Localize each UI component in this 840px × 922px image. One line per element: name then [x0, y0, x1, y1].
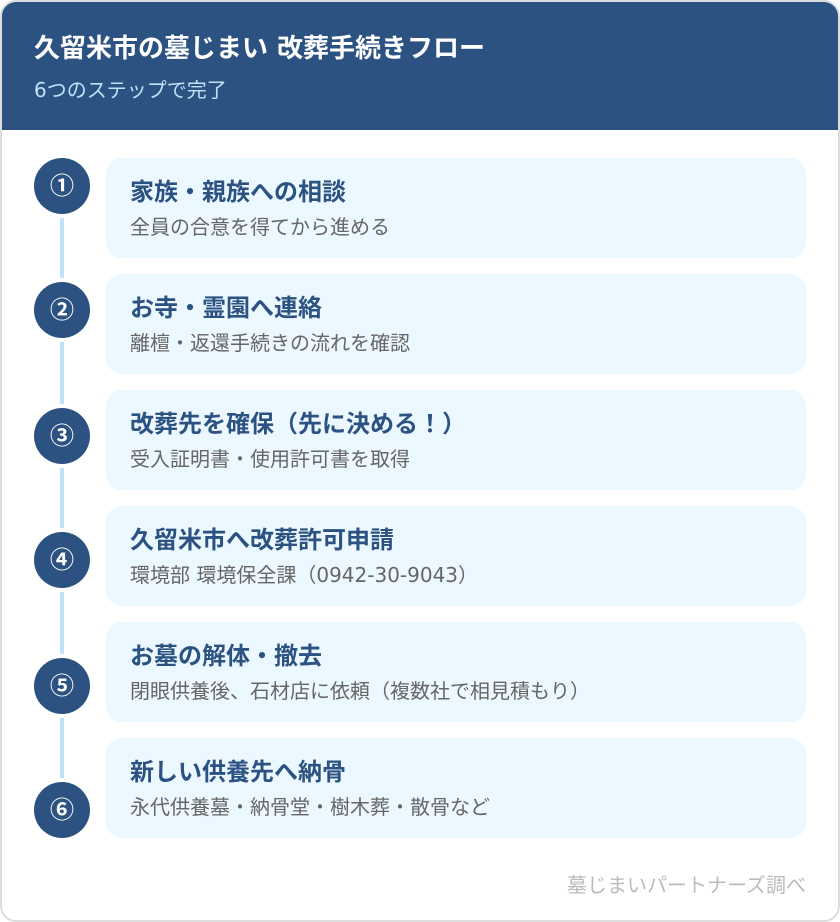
step 5 description: 閉眼供養後、石材店に依頼（複数社で相見積もり） — [130, 679, 590, 703]
step card 5 — [106, 622, 806, 722]
step 4 heading: 久留米市へ改葬許可申請 — [130, 526, 394, 554]
connector 2 — [60, 342, 64, 404]
connector 5 — [60, 718, 64, 778]
step marker 3 — [34, 408, 90, 464]
connector 1 — [60, 218, 64, 278]
step marker 1 — [34, 158, 90, 214]
step 4 description: 環境部 環境保全課（0942-30-9043） — [130, 563, 478, 587]
title: 久留米市の墓じまい 改葬手続きフロー — [34, 34, 485, 64]
connector 3 — [60, 468, 64, 528]
step 3 description: 受入証明書・使用許可書を取得 — [130, 447, 410, 471]
step marker 2 — [34, 282, 90, 338]
step marker 6: ⑥ — [50, 790, 74, 825]
step card 6 — [106, 738, 806, 838]
step 6 description: 永代供養墓・納骨堂・樹木葬・散骨など — [130, 795, 490, 819]
step marker 6 — [34, 782, 90, 838]
step 1 description: 全員の合意を得てから進める — [130, 215, 390, 239]
step 3 heading: 改葬先を確保（先に決める！） — [130, 410, 466, 438]
step marker 4: ④ — [50, 540, 74, 575]
step card 3 — [106, 390, 806, 490]
step card 1 — [106, 158, 806, 258]
step card 4 — [106, 506, 806, 606]
step card 2 — [106, 274, 806, 374]
step marker 5 — [34, 658, 90, 714]
step 5 heading: お墓の解体・撤去 — [130, 642, 322, 670]
step 2 description: 離檀・返還手続きの流れを確認 — [130, 331, 410, 355]
step marker 5: ⑤ — [50, 666, 74, 701]
panel: header band — [2, 2, 838, 130]
step 1 heading: 家族・親族への相談 — [130, 178, 346, 206]
step marker 2: ② — [50, 290, 74, 325]
step marker 3: ③ — [50, 416, 74, 451]
subtitle: 6つのステップで完了 — [34, 78, 227, 102]
step 2 heading: お寺・霊園へ連絡 — [130, 294, 322, 322]
step 6 heading: 新しい供養先へ納骨 — [130, 758, 346, 786]
step marker 1: ① — [50, 166, 74, 201]
step marker 4 — [34, 532, 90, 588]
connector 4 — [60, 592, 64, 654]
source note: 墓じまいパートナーズ調べ — [567, 873, 806, 897]
